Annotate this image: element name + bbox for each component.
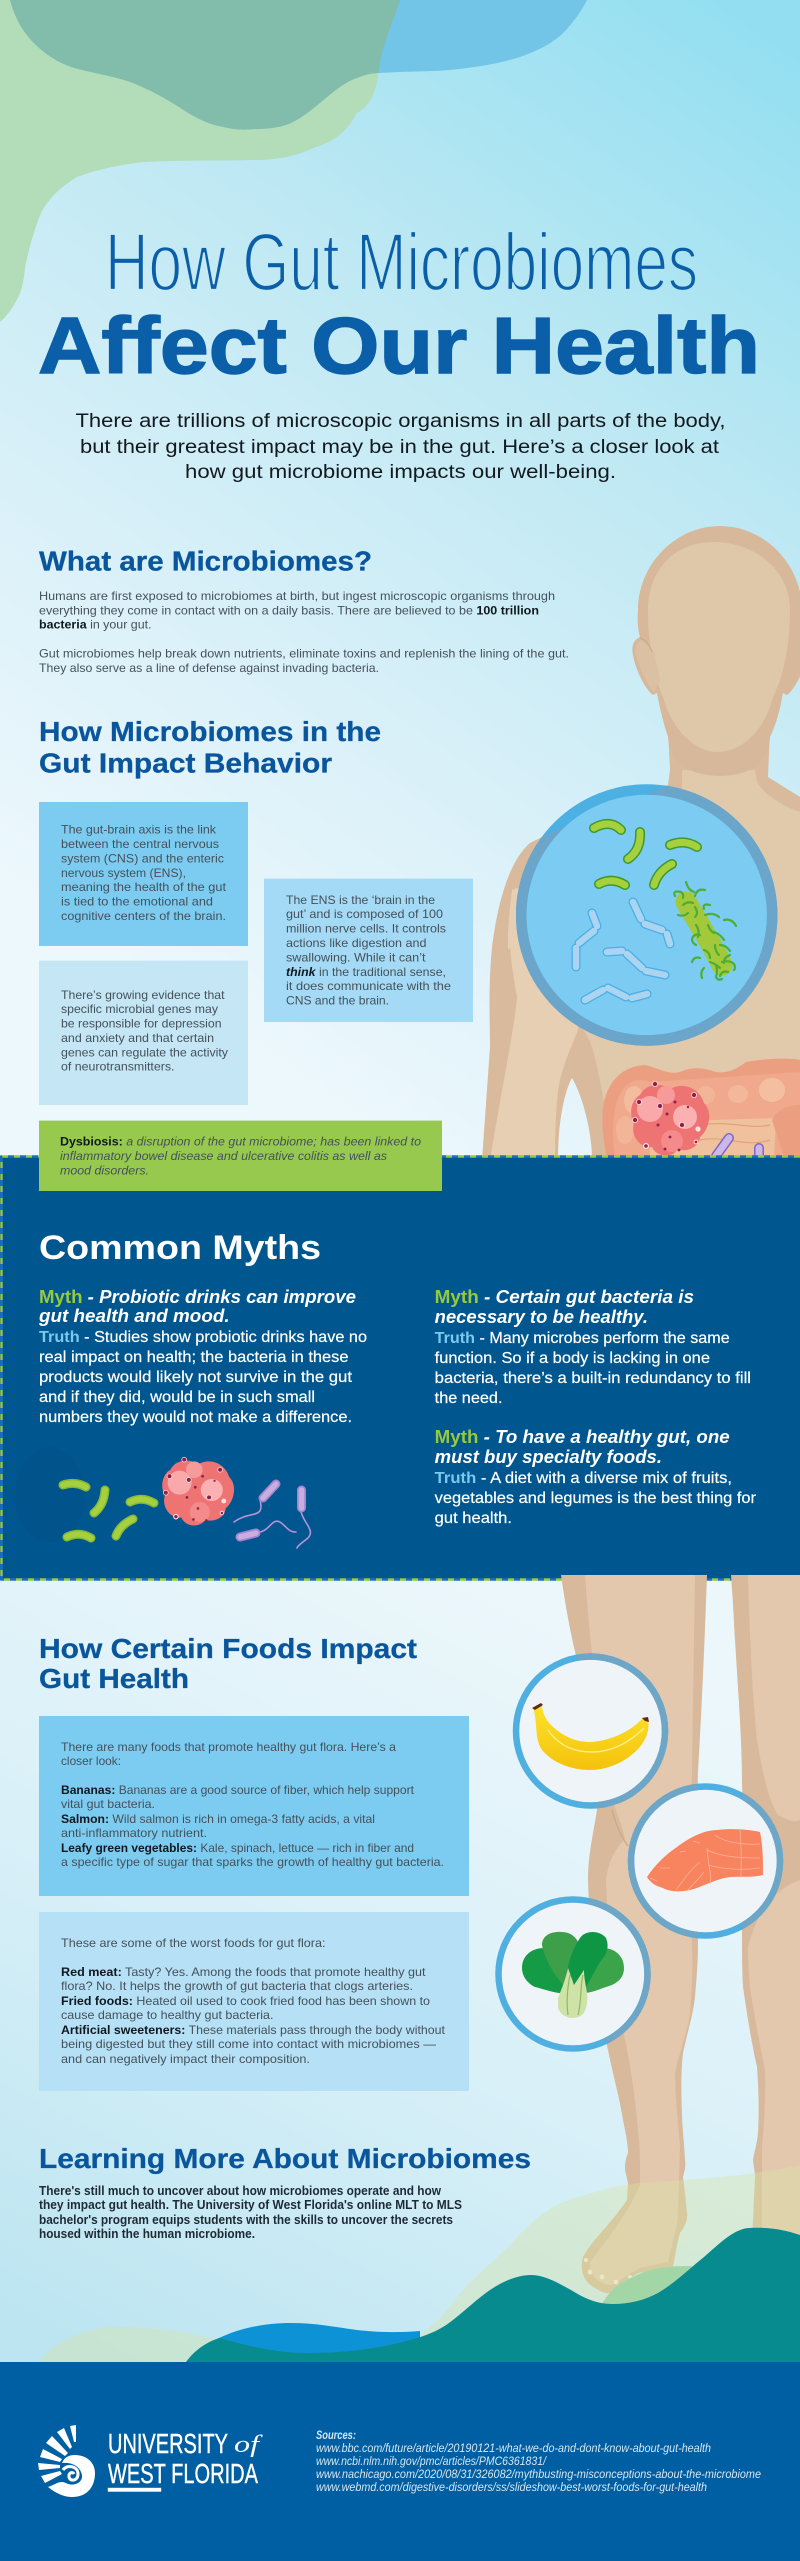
myth two: necessary to be healthy. (435, 1307, 648, 1327)
box: worst foods: These are some of the worst foods for gut flora: (61, 1936, 326, 1950)
box: gut-brain axis: The gut-brain axis is the link (61, 822, 217, 836)
neck and shoulders (482, 730, 800, 1160)
intro paragraph (76, 411, 726, 483)
intro paragraph: how gut microbiome impacts our well-being. (185, 462, 616, 483)
sources (316, 2430, 761, 2494)
box: dysbiosis: mood disorders. (60, 1164, 149, 1178)
myth one: numbers they would not make a difference. (39, 1409, 352, 1426)
paragraph: Gut microbiomes help break down nutrients, eliminate toxins and replenish the lining of the gut. (39, 647, 569, 661)
myth three: vegetables and legumes is the best thing for (435, 1490, 757, 1507)
bacteria illustration (63, 1457, 310, 1548)
logo: wordmark (108, 2428, 263, 2492)
navy myths panel (0, 1156, 800, 1580)
ground waves (38, 2165, 800, 2362)
box: gut-brain axis: between the central nervous (61, 837, 219, 851)
paragraph: housed within the human microbiome. (39, 2227, 255, 2241)
box: microbial genes: and anxiety and that certain (61, 1031, 214, 1045)
intro paragraph: but their greatest impact may be in the gut. Here’s a closer look at (80, 437, 720, 458)
head (632, 526, 800, 776)
myth one: products would likely not survive in the gut (39, 1369, 353, 1386)
box: gut-brain axis: meaning the health of the gut (61, 880, 227, 894)
box: good foods: anti-inflammatory nutrient. (61, 1826, 207, 1840)
circle: banana (516, 1656, 665, 1806)
box: gut-brain axis: cognitive centers of the brain. (61, 909, 226, 923)
box: worst foods: flora? No. It helps the growth of gut bacteria that clogs arteries. (61, 1979, 413, 1993)
sources: www.webmd.com/digestive-disorders/ss/slideshow-best-worst-foods-for-gut-health (316, 2482, 707, 2494)
myth two (435, 1287, 751, 1407)
myth one: gut health and mood. (38, 1306, 230, 1326)
box: worst foods (39, 1912, 469, 2091)
box: gut-brain axis (39, 802, 248, 946)
box: microbial genes: There’s growing evidence that (61, 988, 225, 1002)
myth one: real impact on health; the bacteria in these (39, 1349, 349, 1366)
paragraph (39, 589, 569, 675)
common myths heading: Common Myths (39, 1229, 321, 1267)
icon: salmon fillet (647, 1829, 763, 1891)
what are microbiomes section (39, 546, 569, 675)
icon: banana (532, 1703, 649, 1770)
circle: leafy greens (498, 1900, 648, 2048)
icon: leafy vegetable (522, 1932, 624, 2018)
green rod bacteria (594, 824, 697, 885)
box: ENS: The ENS is the ‘brain in the (286, 893, 435, 907)
myth one (38, 1287, 367, 1426)
heading (39, 716, 381, 778)
box: good foods: vital gut bacteria. (61, 1797, 155, 1811)
box: microbial genes: genes can regulate the activity (61, 1046, 228, 1060)
box: dysbiosis (39, 1121, 442, 1191)
myth one: and if they did, would be in such small (39, 1389, 315, 1406)
box: gut-brain axis: is tied to the emotional and (61, 894, 213, 908)
sources: www.ncbi.nlm.nih.gov/pmc/articles/PMC6361831/ (316, 2456, 548, 2468)
myth three (435, 1427, 757, 1527)
paragraph: everything they come in contact with on a daily basis. There are believed to be 100 trillion (39, 603, 539, 617)
ear (635, 640, 660, 692)
box: worst foods: Artificial sweeteners: These materials pass through the body without (61, 2023, 446, 2037)
arm (490, 880, 585, 1160)
box: microbial genes: be responsible for depression (61, 1017, 222, 1031)
box: gut-brain axis: system (CNS) and the enteric (61, 852, 224, 866)
myth two: function. So if a body is lacking in one (435, 1350, 710, 1367)
myth three: gut health. (435, 1510, 512, 1527)
learning more section (39, 2143, 531, 2241)
box: worst foods: Red meat: Tasty? Yes. Among the foods that promote healthy gut (61, 1965, 426, 1979)
box: worst foods: being digested but they still come into contact with microbiomes — (61, 2037, 436, 2051)
heading: Gut Impact Behavior (39, 748, 332, 778)
myth three: Truth - A diet with a diverse mix of fruits, (435, 1470, 732, 1487)
legs illustration (561, 1575, 800, 2293)
pale green hill (38, 2165, 800, 2362)
heading: How Certain Foods Impact (39, 1633, 417, 1664)
box: good foods: Leafy green vegetables: Kale, spinach, lettuce — rich in fiber and (61, 1841, 414, 1855)
paragraph: Humans are first exposed to microbiomes at birth, but ingest microscopic organisms through (39, 589, 555, 603)
box: dysbiosis: Dysbiosis: a disruption of the gut microbiome; has been linked to (60, 1134, 421, 1148)
box: ENS (264, 879, 473, 1022)
box: worst foods: cause damage to healthy gut bacteria. (61, 2008, 274, 2022)
purple rods (716, 1138, 729, 1156)
title: Affect Our Health (38, 301, 760, 390)
myth one: Myth - Probiotic drinks can improve (39, 1287, 356, 1307)
paragraph: bacteria in your gut. (39, 618, 152, 632)
heading: Learning More About Microbiomes (39, 2143, 531, 2174)
red bacteria cluster (631, 1081, 709, 1156)
myth two: Truth - Many microbes perform the same (435, 1330, 730, 1347)
box: microbial genes: of neurotransmitters. (61, 1060, 174, 1074)
paragraph: they impact gut health. The University of West Florida's online MLT to MLS (39, 2198, 462, 2212)
myth two: the need. (435, 1390, 502, 1407)
light green mound (602, 2266, 720, 2320)
logo: wordmark: WEST FLORIDA (108, 2458, 258, 2489)
logo: wordmark: of (234, 2432, 263, 2458)
box: ENS: it does communicate with the (286, 979, 451, 993)
myth two: bacteria, there’s a built-in redundancy to fill (435, 1370, 751, 1387)
box: ENS: swallowing. While it can’t (286, 950, 426, 964)
heading: Gut Health (39, 1663, 189, 1694)
how microbiomes impact behavior section (39, 716, 473, 1191)
box: dysbiosis: inflammatory bowel disease and ulcerative colitis as well as (60, 1149, 387, 1163)
circle: salmon (631, 1786, 780, 1936)
paragraph: There's still much to uncover about how microbiomes operate and how (39, 2184, 441, 2198)
myth three: Myth - To have a healthy gut, one (435, 1427, 730, 1447)
box: ENS: CNS and the brain. (286, 994, 389, 1008)
sources: www.bbc.com/future/article/20190121-what-we-do-and-dont-know-about-gut-health (316, 2443, 711, 2455)
paragraph: They also serve as a line of defense against invading bacteria. (39, 661, 379, 675)
body illustration: head and torso (482, 526, 800, 1160)
myth two: Myth - Certain gut bacteria is (435, 1287, 694, 1307)
fuzzy green bacterium (674, 882, 736, 980)
box: good foods: Bananas: Bananas are a good source of fiber, which help support (61, 1783, 415, 1797)
box: worst foods: Fried foods: Heated oil used to cook fried food has been shown to (61, 1994, 430, 2008)
box: worst foods: and can negatively impact their composition. (61, 2052, 310, 2066)
intro paragraph: There are trillions of microscopic organisms in all parts of the body, (76, 411, 726, 432)
food circles (498, 1656, 780, 2048)
box: good foods: Salmon: Wild salmon is rich in omega-3 fatty acids, a vital (61, 1812, 375, 1826)
blue wave (219, 2323, 420, 2362)
box: ENS: actions like digestion and (286, 936, 426, 950)
sources: www.nachicago.com/2020/08/31/326082/mythbusting-misconceptions-about-the-microbiome (316, 2469, 761, 2481)
how certain foods section (39, 1633, 469, 2091)
box: good foods (39, 1716, 469, 1896)
box: microbial genes (39, 961, 248, 1105)
paragraph: bachelor's program equips students with the skills to uncover the secrets (39, 2213, 453, 2227)
blue rod chains (576, 902, 670, 1000)
paragraph (39, 2184, 462, 2241)
box: gut-brain axis: nervous system (ENS), (61, 866, 186, 880)
box: ENS: gut’ and is composed of 100 (286, 907, 443, 921)
teal wave (186, 2228, 800, 2362)
logo: wordmark: UNIVERSITY (108, 2428, 228, 2459)
box: good foods: closer look: (61, 1754, 121, 1768)
heading (39, 1633, 417, 1694)
box: ENS: think in the traditional sense, (286, 965, 446, 979)
magnifier circle with bacteria (521, 790, 772, 1040)
intestines (602, 1059, 800, 1162)
box: good foods: There are many foods that promote healthy gut flora. Here’s a (61, 1740, 396, 1754)
footer (0, 2362, 800, 2561)
box: microbial genes: specific microbial genes may (61, 1002, 218, 1016)
box: ENS: million nerve cells. It controls (286, 922, 446, 936)
sources: Sources: (316, 2430, 356, 2442)
box: good foods: a specific type of sugar that sparks the growth of healthy gut bacteria. (61, 1855, 444, 1869)
heading: What are Microbiomes? (39, 546, 372, 576)
logo: shell (38, 2425, 95, 2497)
myth one: Truth - Studies show probiotic drinks have no (39, 1329, 367, 1346)
title (38, 217, 760, 390)
heading: How Microbiomes in the (39, 716, 381, 747)
myth three: must buy specialty foods. (435, 1447, 662, 1467)
top corner blobs (0, 0, 587, 322)
